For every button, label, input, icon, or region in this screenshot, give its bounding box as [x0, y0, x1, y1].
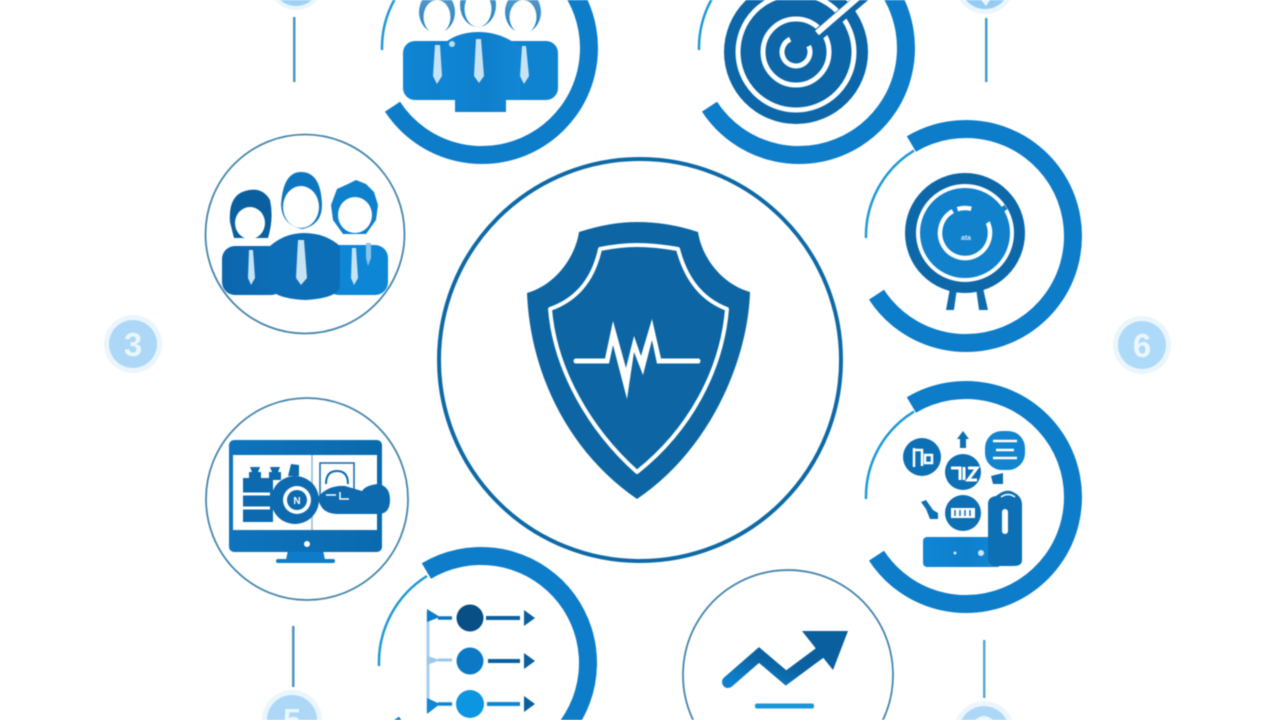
icon: rising arrow [728, 631, 848, 708]
panel: team circle, left [206, 134, 404, 334]
connector line: top right [985, 18, 988, 82]
number badge 6: 6 [1133, 327, 1151, 364]
icon: monitor with video call [229, 440, 390, 563]
central circle with shield [439, 159, 841, 561]
icon: target on stand: ata [961, 235, 971, 242]
icon: flow list with three nodes [427, 604, 535, 718]
panel: team, top left [382, 0, 589, 155]
panel: monitor circle, left [206, 398, 408, 600]
icon: cluster of process symbols [903, 431, 1025, 567]
connector line: top left [293, 17, 296, 82]
icon: target on stand [905, 173, 1025, 310]
number badge 3 [104, 315, 162, 373]
panel: target with arrow, top right [699, 0, 906, 155]
number badge top right [955, 0, 1015, 14]
icon: target [724, 0, 868, 124]
number badge 3: 3 [124, 326, 142, 363]
icon: team of three [222, 172, 388, 300]
icon: heartbeat line [574, 319, 700, 399]
connector line: bottom left [292, 626, 294, 687]
icon: three business people [403, 0, 558, 112]
panel: process icons, lower right [866, 390, 1073, 604]
chart baseline [755, 704, 814, 708]
number badge 5 [262, 690, 322, 720]
number badge 6 [1113, 316, 1171, 374]
panel: growth chart circle, bottom [683, 570, 893, 720]
connector line: bottom right [983, 640, 986, 698]
panel: target on stand, right [866, 129, 1073, 343]
panel: flow list, bottom [379, 547, 597, 720]
number badge bottom right [956, 701, 1012, 720]
number badge top left [268, 0, 324, 10]
icon: monitor with video call: N [293, 496, 301, 507]
icon: shield [527, 222, 750, 499]
shield inner outline [550, 245, 727, 472]
